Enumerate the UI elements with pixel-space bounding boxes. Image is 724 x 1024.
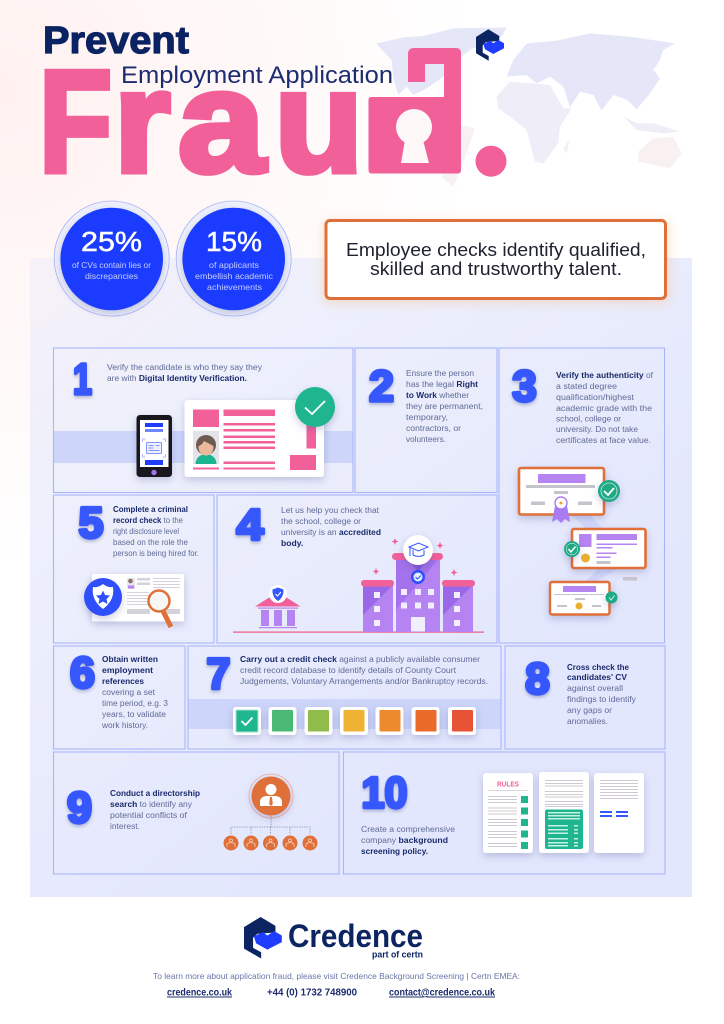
text [113, 504, 199, 558]
text: search to identify any [110, 799, 193, 809]
number 5: 5 [78, 498, 104, 548]
text: work history. [101, 720, 148, 730]
text: record check to the [113, 515, 183, 525]
icon: check badge [295, 387, 335, 427]
text: contractors, or [406, 423, 461, 433]
ground line [233, 632, 484, 633]
footer logo: part of certn [372, 950, 423, 960]
icon: magnifier [148, 590, 171, 627]
icon: police badge [84, 578, 122, 616]
contact links: +44 (0) 1732 748900 [267, 988, 358, 998]
text [361, 824, 455, 856]
number 4: 4 [236, 500, 264, 550]
stat: 15%: achievements [207, 282, 262, 292]
text [556, 370, 654, 445]
panel: step 3 [499, 348, 664, 643]
stat: 25%: discrepancies [85, 271, 138, 281]
number 9: 9 [67, 784, 92, 832]
heading: Employment Application: Employment Application [121, 62, 393, 89]
text: interest. [110, 821, 140, 831]
document: checklist [539, 772, 589, 853]
text: Obtain written [102, 654, 158, 664]
stat: 15% [176, 201, 291, 316]
text: to Work whether [406, 390, 469, 400]
text: qualification/highest [556, 392, 635, 402]
text [101, 654, 168, 730]
footer text: To learn more about application fraud, please visit Credence Background Screening | Certn EMEA: [153, 971, 520, 981]
text: candidates' CV [567, 672, 627, 682]
number 1: 1 [73, 355, 92, 404]
icon: certificate 2 [564, 529, 646, 568]
number 7: 7 [206, 650, 230, 698]
contact links: credence.co.uk [167, 988, 232, 998]
text [281, 505, 381, 548]
number 10: 10 [362, 768, 408, 818]
text: time period, e.g. 3 [102, 698, 168, 708]
text: based on the role the [113, 537, 188, 547]
text: Complete a criminal [113, 504, 188, 514]
footer logo [244, 917, 423, 960]
small dash [623, 577, 637, 580]
icon: university [361, 535, 475, 632]
text: company background [361, 835, 448, 845]
text: are with Digital Identity Verification. [107, 373, 247, 383]
text: Ensure the person [406, 368, 474, 378]
text: Create a comprehensive [361, 824, 455, 834]
text: Let us help you check that [281, 505, 380, 515]
text: Conduct a directorship [110, 788, 200, 798]
stat: 25%: 25% [81, 226, 142, 257]
text: references [102, 676, 144, 686]
text [107, 362, 263, 383]
panel: step 8 [505, 646, 665, 749]
heading: Fraud: u [274, 40, 363, 202]
text: credit record database to identify details of County Court [240, 665, 457, 675]
number 8: 8 [525, 654, 550, 704]
text [240, 654, 488, 686]
icon: record card [92, 574, 184, 622]
heading: Fraud: F [39, 40, 112, 202]
number 3: 3 [512, 362, 537, 411]
number 6: 6 [70, 648, 95, 698]
text: academic grade with the [556, 403, 652, 413]
text: volunteers. [406, 434, 446, 444]
document: rules [483, 773, 533, 853]
document: rules: RULES [497, 782, 519, 788]
icon: padlock d [368, 48, 461, 174]
text: Verify the candidate is who they say they [107, 362, 263, 372]
text: Cross check the [567, 662, 629, 672]
world map [377, 27, 682, 187]
callout: Employee checks identify qualified, [346, 239, 646, 260]
stat: 25%: of CVs contain lies or [72, 260, 151, 270]
text: any gaps or [567, 705, 612, 715]
panel: step 5 [54, 495, 214, 643]
title [39, 20, 506, 202]
text: screening policy. [361, 846, 428, 856]
panel: step 4 [217, 495, 497, 643]
text: years, to validate [102, 709, 166, 719]
text: a stated degree [556, 381, 617, 391]
heading: Fraud: a [178, 40, 266, 202]
text: against overall [567, 683, 623, 693]
text: certificates at face value. [556, 435, 651, 445]
panel: step 10 [344, 752, 665, 874]
full stop [476, 146, 506, 177]
icon: phone [136, 415, 172, 477]
text [110, 788, 200, 831]
icon: org chart [224, 774, 318, 850]
panel: step 9 [54, 752, 339, 874]
stat: 15%: 15% [206, 226, 262, 257]
panel: step 1 [54, 348, 353, 492]
text: anomalies. [567, 716, 608, 726]
text: the school, college or [281, 516, 361, 526]
text: Verify the authenticity of [556, 370, 654, 380]
heading: Fraud [39, 40, 363, 202]
number 2: 2 [369, 362, 394, 411]
icon: ID card [184, 400, 324, 477]
text: findings to identify [567, 694, 637, 704]
contact links [167, 988, 495, 998]
callout [322, 220, 670, 304]
panel: step 6 [54, 646, 185, 749]
contact links: contact@credence.co.uk [389, 988, 495, 998]
text: Carry out a credit check against a publicly available consumer [240, 654, 480, 664]
heading: Prevent: Prevent [43, 20, 189, 62]
heading: Fraud: r [114, 40, 170, 202]
icon: certificate 3 [550, 582, 618, 614]
text: has the legal Right [406, 379, 478, 389]
text: covering a set [102, 687, 156, 697]
panel: step 7 [188, 646, 501, 749]
small logo [476, 29, 504, 61]
text [406, 368, 483, 444]
text: university is an accredited [281, 527, 381, 537]
callout: skilled and trustworthy talent. [370, 258, 622, 279]
text [567, 662, 637, 726]
text: Judgements, Voluntary Arrangements and/or Bankruptcy records. [240, 676, 488, 686]
text: person is being hired for. [113, 548, 199, 558]
stat: 15%: of applicants [209, 260, 259, 270]
text: temporary, [406, 412, 448, 422]
text: right disclosure level [113, 526, 179, 536]
icon: certificate 1 [519, 468, 620, 523]
stat: 15%: embellish academic [195, 271, 273, 281]
document: signature [594, 773, 644, 853]
rating scale [233, 707, 476, 735]
footer logo: Credence [288, 918, 423, 954]
text: school, college or [556, 414, 621, 424]
panel: step 2 [355, 348, 497, 492]
text: employment [102, 665, 153, 675]
text: university. Do not take [556, 424, 638, 434]
text: body. [281, 538, 303, 548]
text: they are permanent, [406, 401, 483, 411]
text: potential conflicts of [110, 810, 188, 820]
stat: 25% [54, 201, 169, 316]
connector bands [572, 515, 618, 581]
icon: bank [255, 585, 300, 628]
